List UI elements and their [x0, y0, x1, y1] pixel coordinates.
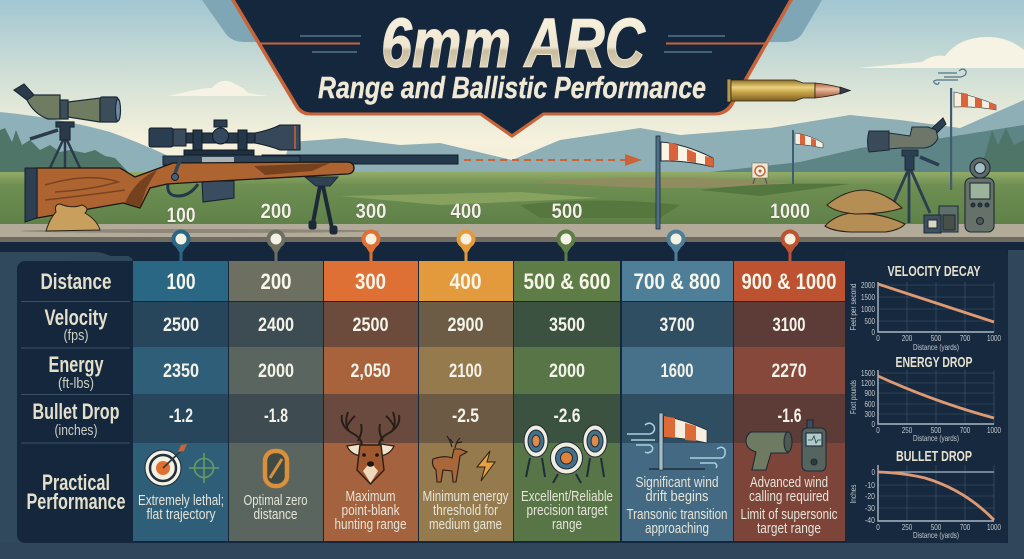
chart: velocity decay: 2000 — [861, 280, 875, 290]
column 400: 2100 — [449, 361, 482, 382]
column 500 and 600: Excellent/Reliable — [521, 488, 613, 505]
mountains — [0, 100, 1024, 175]
sky background — [0, 0, 1024, 175]
rifle — [25, 120, 458, 234]
panel: charts — [845, 250, 1008, 543]
column 500 and 600: 3500 — [549, 315, 585, 336]
column 400: -2.5 — [452, 406, 479, 427]
column 900 and 1000: calling required — [749, 488, 829, 505]
chart: velocity decay: 1000 — [861, 304, 875, 314]
column 100: -1.2 — [169, 406, 193, 427]
chart: energy drop — [848, 354, 1001, 443]
column 200: 200 — [260, 269, 292, 294]
chart: velocity decay: 200 — [902, 333, 912, 343]
chart: bullet drop: -10 — [865, 480, 875, 490]
column 400: Minimum energy — [422, 488, 509, 505]
icon: rangefinder and wind meter — [746, 420, 826, 471]
chart: bullet drop: -40 — [865, 515, 875, 525]
column 300: 2500 — [352, 315, 388, 336]
column 100: 2350 — [163, 361, 199, 382]
bipod — [305, 177, 338, 234]
chart: energy drop: 500 — [931, 425, 941, 435]
column 400: threshold for — [433, 502, 498, 519]
column 300: Maximum — [346, 488, 396, 505]
shooting road — [0, 224, 1024, 242]
chart: energy drop: Foot pounds — [848, 380, 858, 414]
column 400 — [419, 232, 513, 541]
title banner — [231, 0, 793, 138]
chart: bullet drop: -30 — [865, 503, 875, 513]
column 200 — [229, 232, 323, 541]
panel: row labels: Performance — [26, 489, 126, 514]
chart: energy drop: 250 — [902, 425, 912, 435]
chart: energy drop: 0 — [876, 425, 880, 435]
panel: row labels: Distance — [40, 269, 112, 294]
chart: velocity decay: 1500 — [861, 292, 875, 302]
distance markers — [166, 200, 810, 227]
windsock right — [950, 88, 996, 190]
panel: row labels: Bullet Drop — [32, 399, 120, 424]
icon: target with arrow — [145, 444, 219, 486]
spotting scope left — [14, 84, 120, 168]
column 200: Optimal zero — [244, 492, 308, 509]
column 900 and 1000: Advanced wind — [750, 474, 828, 491]
icon: deer and lightning — [432, 436, 495, 482]
chart: bullet drop: 1000 — [987, 522, 1001, 532]
distance markers: 300 — [356, 200, 386, 223]
column 200: -1.8 — [264, 406, 288, 427]
chart: energy drop: 900 — [864, 388, 875, 398]
title: 6mm ARC — [381, 4, 646, 82]
chart: velocity decay — [848, 263, 1001, 352]
column 100: 100 — [166, 269, 196, 294]
panel: row labels — [17, 261, 142, 543]
column 100: Extremely lethal; — [138, 492, 224, 509]
chart: velocity decay: 500 — [864, 316, 875, 326]
distance markers: 500 — [552, 200, 582, 223]
distance markers: 100 — [166, 204, 196, 227]
chart: bullet drop — [848, 448, 1001, 540]
butt pad — [25, 168, 37, 222]
column 900 and 1000: Limit of supersonic — [740, 506, 838, 523]
rifle scope — [149, 120, 300, 155]
panel: row labels: (inches) — [54, 422, 98, 439]
chart: bullet drop: 500 — [931, 522, 941, 532]
chart: velocity decay: Distance (yards) — [913, 342, 959, 352]
chart: energy drop: 1200 — [861, 378, 875, 388]
column 900 and 1000: 3100 — [772, 315, 806, 336]
chart: energy drop: Distance (yards) — [913, 433, 959, 443]
column 700 and 800: drift begins — [646, 488, 708, 505]
icon: wind swirl — [934, 69, 966, 84]
target far — [752, 163, 768, 184]
column 100: flat trajectory — [146, 506, 216, 523]
chart: velocity decay: Feet per second — [848, 283, 858, 330]
column 500 and 600: 2000 — [549, 361, 585, 382]
chart: bullet drop: -20 — [865, 491, 875, 501]
column 900 and 1000: 900 & 1000 — [742, 269, 836, 294]
chart: energy drop: ENERGY DROP — [896, 354, 972, 371]
chart: velocity decay: 1000 — [987, 333, 1001, 343]
trigger guard — [168, 183, 198, 196]
windsock far — [792, 130, 823, 184]
column 900 and 1000: 2270 — [772, 361, 806, 382]
column 300 — [324, 232, 418, 541]
chart: bullet drop: 0 — [872, 467, 875, 477]
panel: row labels: Velocity — [44, 305, 108, 330]
chart: bullet drop: 0 — [876, 522, 880, 532]
column 300: 300 — [355, 269, 386, 294]
column 700 and 800: 700 & 800 — [634, 269, 720, 294]
spotting scope right — [868, 118, 946, 223]
lower background — [0, 242, 1024, 559]
chart: energy drop: 600 — [864, 399, 875, 409]
distance markers: 400 — [450, 200, 482, 223]
column 400: medium game — [429, 516, 502, 533]
column 500 and 600: range — [552, 516, 582, 533]
chart: velocity decay: 500 — [931, 333, 941, 343]
light blue banner backing — [202, 0, 822, 42]
column 300: point-blank — [342, 502, 400, 519]
distance markers: 200 — [260, 200, 292, 223]
icon: wind meter — [965, 158, 994, 232]
subtitle: Range and Ballistic Performance — [318, 70, 706, 105]
column 500 and 600: 500 & 600 — [524, 269, 610, 294]
chart: energy drop: 1500 — [861, 368, 875, 378]
column 700 and 800: Significant wind — [636, 474, 718, 491]
sandbags — [825, 190, 905, 232]
column 300: 2,050 — [350, 361, 390, 382]
column 300: hunting range — [334, 516, 406, 533]
column 700 and 800: Transonic transition — [626, 506, 728, 523]
column 200: distance — [254, 506, 298, 523]
speed lines — [259, 36, 768, 52]
panel: row labels: (ft-lbs) — [58, 375, 94, 392]
chart: bullet drop: 250 — [902, 522, 912, 532]
icon: three targets — [524, 425, 607, 483]
chart: velocity decay: 0 — [876, 333, 880, 343]
column 400: 2900 — [448, 315, 484, 336]
icon: zero — [265, 451, 287, 486]
stock — [37, 162, 354, 218]
chart: velocity decay: 0 — [872, 327, 875, 337]
chart: bullet drop: Distance (yards) — [913, 530, 959, 540]
icon: bullet cartridge — [727, 79, 850, 102]
barrel — [262, 155, 458, 164]
flight path arrow — [464, 154, 642, 166]
column 200: 2400 — [258, 315, 294, 336]
sandbag under stock — [46, 204, 100, 231]
chart: velocity decay: 700 — [960, 333, 970, 343]
panel: row labels: Energy — [48, 352, 104, 377]
chart: energy drop: 1000 — [987, 425, 1001, 435]
column 500 and 600 — [514, 232, 620, 541]
column 700 and 800: approaching — [645, 520, 709, 537]
chart: energy drop: 0 — [872, 419, 875, 429]
column 500 and 600: -2.6 — [554, 406, 580, 427]
chart: velocity decay: VELOCITY DECAY — [888, 263, 980, 280]
column 100 — [133, 232, 228, 541]
panel: row labels: Practical — [42, 470, 110, 495]
windsock near — [656, 136, 713, 229]
column 500 and 600: precision target — [526, 502, 608, 519]
panel: row labels: (fps) — [64, 327, 89, 344]
bolt — [174, 158, 181, 176]
column 100: 2500 — [163, 315, 199, 336]
column 700 and 800: 1600 — [660, 361, 694, 382]
column 900 and 1000: target range — [757, 520, 821, 537]
column 700 and 800 — [622, 232, 733, 541]
distance markers: 1000 — [770, 200, 810, 223]
action — [163, 151, 300, 165]
chart: bullet drop: BULLET DROP — [896, 448, 972, 465]
chart: bullet drop: Inches — [848, 484, 858, 504]
column 700 and 800: 3700 — [660, 315, 694, 336]
chart: bullet drop: 700 — [960, 522, 970, 532]
clouds — [168, 37, 1024, 96]
column 900 and 1000 — [734, 232, 845, 541]
ammo boxes — [924, 206, 958, 233]
icon: windsock with wind — [627, 413, 725, 470]
column 200: 2000 — [258, 361, 294, 382]
column 900 and 1000: -1.6 — [778, 406, 802, 427]
range field — [0, 172, 1024, 225]
chart: energy drop: 300 — [864, 409, 875, 419]
chart: energy drop: 700 — [960, 425, 970, 435]
magazine — [202, 181, 234, 202]
column 400: 400 — [450, 269, 482, 294]
icon: deer head — [342, 412, 399, 484]
